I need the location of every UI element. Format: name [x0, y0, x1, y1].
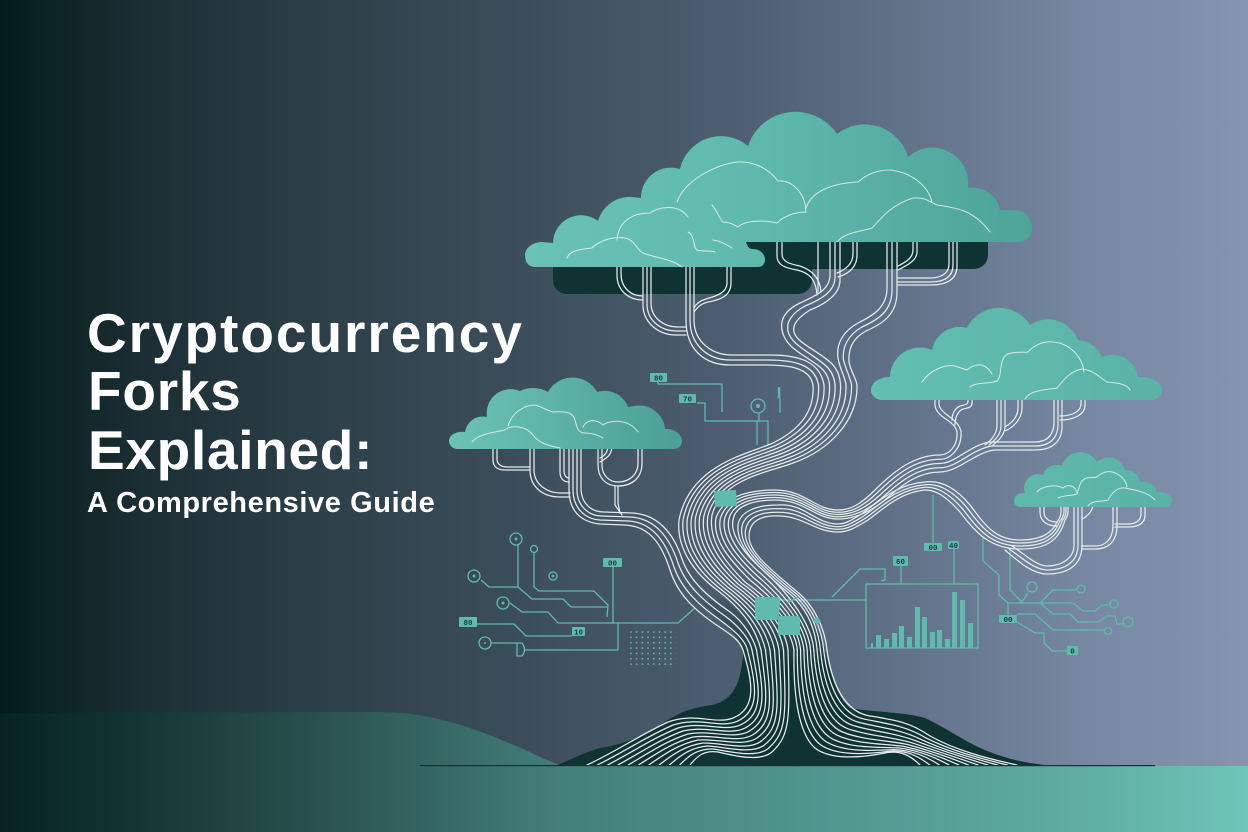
lower left circuit: 80 [463, 620, 473, 628]
right root fan [794, 650, 1017, 765]
left small cloud [449, 378, 682, 449]
tree trunk main strands [679, 235, 897, 650]
circuit network right [983, 537, 1133, 656]
upper left circuit: 80 [654, 376, 663, 384]
circuit network right: 0 [1070, 648, 1075, 656]
bar chart panel: 00 [928, 545, 938, 553]
node squares on trunk [714, 490, 821, 635]
title [87, 302, 524, 481]
circuit network left [459, 373, 780, 665]
circuit network right: 00 [1003, 617, 1013, 625]
dark canopy shadows [553, 235, 988, 294]
bar chart panel: 40 [949, 543, 958, 551]
tree trunk base [555, 595, 1058, 766]
ground strip [0, 766, 1248, 832]
small right tree branches [738, 482, 1145, 650]
bar chart panel [780, 495, 978, 648]
lower left circuit: 00 [608, 560, 617, 568]
upper canopy branches [617, 235, 957, 335]
left hill [0, 712, 565, 767]
left small tree branches [493, 440, 756, 650]
right mid cloud [871, 308, 1162, 400]
title: Explained: [88, 419, 373, 481]
upper left circuit [650, 373, 780, 445]
bar chart panel: 60 [896, 559, 905, 567]
lower left circuit [459, 533, 695, 656]
title: Forks [88, 360, 242, 422]
dot grid [630, 631, 676, 665]
right small cloud [1014, 452, 1172, 507]
title: Cryptocurrency [87, 302, 524, 364]
subtitle: A Comprehensive Guide [87, 487, 435, 519]
upper left circuit: 70 [683, 396, 692, 404]
left root fan [587, 650, 789, 765]
ground horizon line [420, 765, 1155, 766]
lower left circuit: 10 [574, 630, 583, 638]
main canopy cloud [525, 112, 1032, 267]
right upper branches [715, 395, 1085, 650]
